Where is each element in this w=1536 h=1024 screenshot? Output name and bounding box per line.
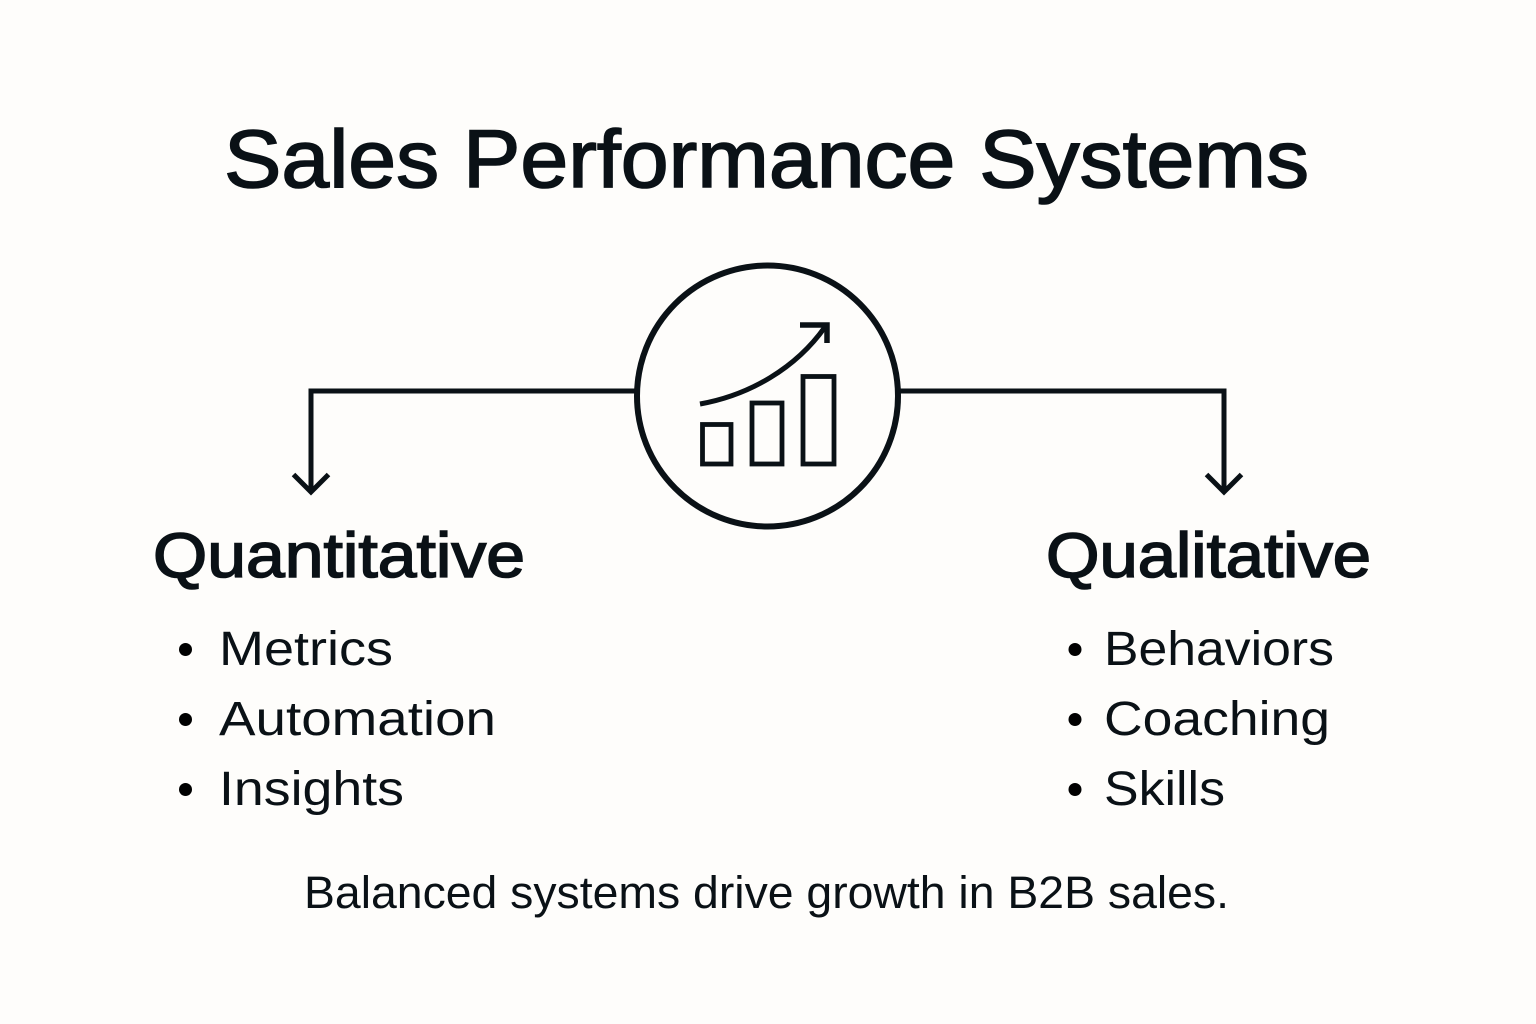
panel: qualitative	[1046, 521, 1371, 816]
list: quantitative items: Insights	[219, 763, 404, 816]
list: qualitative items: Behaviors	[1104, 623, 1334, 676]
connector arrow: right	[899, 391, 1242, 492]
list: qualitative items: Skills	[1104, 763, 1225, 816]
panel: quantitative	[153, 521, 525, 816]
title: Sales Performance Systems	[224, 114, 1309, 205]
heading: qualitative: Qualitative	[1046, 521, 1371, 591]
list: quantitative items: Metrics	[219, 623, 393, 676]
list: qualitative items: Coaching	[1104, 693, 1330, 746]
caption: Balanced systems drive growth in B2B sales.	[304, 867, 1229, 918]
list: quantitative items: Automation	[219, 693, 496, 746]
list: quantitative items	[179, 623, 496, 816]
heading: quantitative: Quantitative	[153, 521, 525, 591]
list: qualitative items	[1068, 623, 1334, 816]
connector arrow: left	[294, 391, 637, 492]
icon: growth chart in circle	[637, 266, 898, 526]
